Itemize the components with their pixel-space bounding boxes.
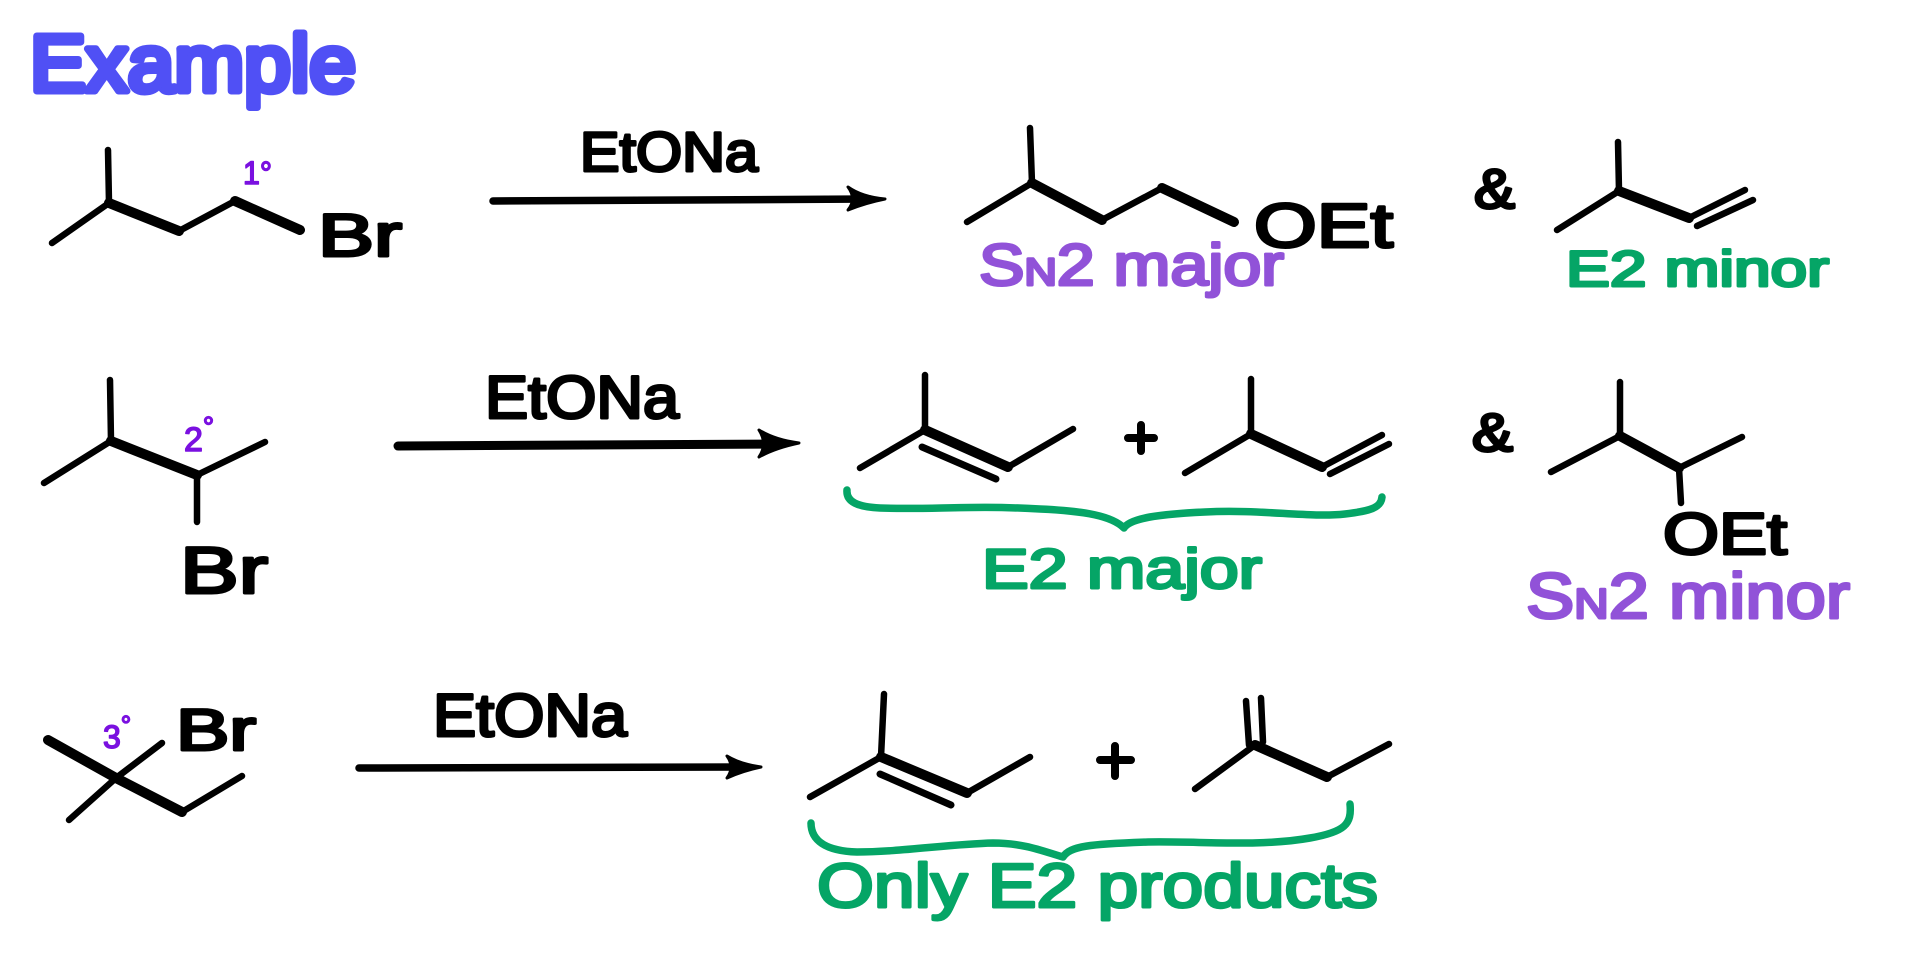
row 2: label SN2 minor: SN2 minor <box>1526 560 1850 632</box>
row 2: SN2 minor ether product <box>1551 382 1787 567</box>
row 1: ampersand: & <box>1474 157 1515 220</box>
row 2: secondary bromide reactant: Br <box>180 533 268 607</box>
row 1: primary bromide reactant <box>52 150 402 269</box>
row 3: brace under E2 products <box>811 804 1350 857</box>
row 3: tertiary bromide reactant: 3 <box>103 719 121 755</box>
row 1: label SN2 major: SN2 major <box>979 233 1284 298</box>
row 3: 1,1-disubstituted alkene product <box>1195 698 1389 789</box>
row 1: reaction arrow <box>493 187 885 210</box>
title: Example: Example <box>30 19 356 108</box>
row 3: reagent EtONa: EtONa <box>433 682 628 749</box>
row 2: terminal alkene product <box>1185 379 1389 474</box>
row 2: secondary bromide reactant <box>44 380 268 607</box>
row 1: label E2 minor: E2 minor <box>1566 241 1829 297</box>
row 3: label Only E2 products: Only E2 products <box>817 852 1378 921</box>
row 3: tertiary bromide reactant <box>48 698 256 820</box>
row 2: ampersand: & <box>1472 403 1513 463</box>
row 2: SN2 minor ether product: OEt <box>1663 502 1787 567</box>
row 3: reaction arrow <box>359 756 761 778</box>
row 1: primary bromide reactant: 1° <box>243 155 272 191</box>
row 1: SN2 major ether product <box>967 128 1393 261</box>
row 1: E2 minor alkene product <box>1557 142 1753 230</box>
row 1: reagent EtONa: EtONa <box>580 120 759 183</box>
row 3: tertiary bromide reactant: ° <box>121 710 131 740</box>
row 2: reagent EtONa: EtONa <box>485 364 680 431</box>
row 2: secondary bromide reactant: 2 <box>184 421 203 459</box>
row 2: plus sign <box>1128 425 1154 451</box>
row 1: primary bromide reactant: Br <box>318 202 402 269</box>
row 2: trisubstituted alkene product <box>860 375 1073 479</box>
row 2: label E2 major: E2 major <box>982 537 1262 600</box>
row 2: secondary bromide reactant: ° <box>203 411 214 442</box>
row 2: reaction arrow <box>398 430 799 457</box>
row 2: brace under E2 products <box>847 490 1382 528</box>
row 3: plus sign <box>1100 746 1131 776</box>
row 3: tertiary bromide reactant: Br <box>176 698 256 763</box>
row 1: SN2 major ether product: OEt <box>1254 192 1393 261</box>
row 3: trisubstituted alkene product <box>810 694 1030 805</box>
